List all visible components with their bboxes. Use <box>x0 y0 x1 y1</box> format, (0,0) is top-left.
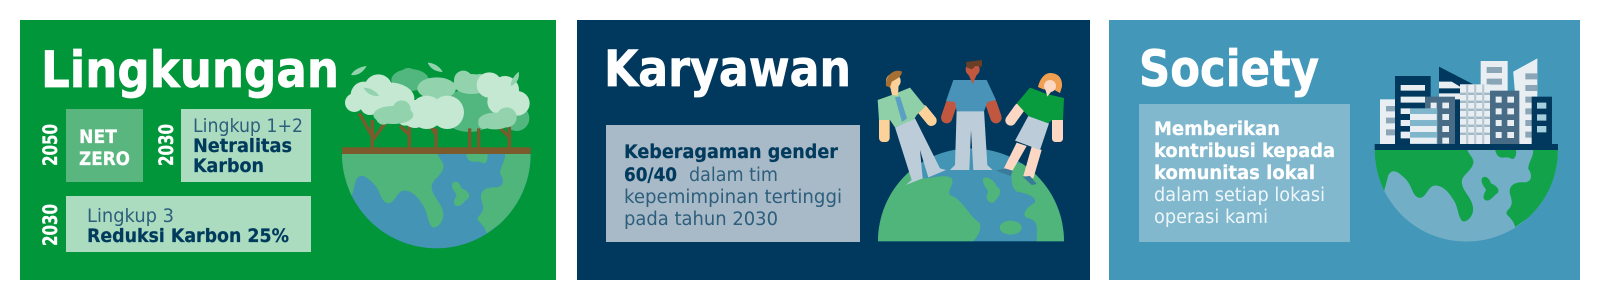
text box: gender diversity: 60/40 <box>624 165 677 186</box>
ground bar <box>1375 144 1558 150</box>
person: man in green shirt <box>878 71 946 185</box>
text box: gender diversity: kepemimpinan tertinggi <box>624 187 842 208</box>
year label 2030 scope 1+2: 2030 <box>155 124 178 166</box>
panel: Society <box>1109 20 1580 280</box>
ground bar <box>342 147 531 154</box>
globe half <box>340 153 533 250</box>
text box: community contribution: dalam setiap lokasi <box>1154 185 1325 206</box>
year label 2030 scope 3: 2030 <box>39 204 62 246</box>
text box: community contribution: Memberikan <box>1154 119 1280 140</box>
box: net zero: NET <box>79 126 117 148</box>
panel: Lingkungan <box>20 20 556 280</box>
box: carbon neutrality: Karbon <box>193 155 264 177</box>
panel: Karyawan <box>577 20 1090 280</box>
illustration: trees on globe <box>340 63 533 250</box>
person: man in blue shirt <box>946 60 996 170</box>
box: carbon reduction <box>66 196 311 252</box>
text box: gender diversity: pada tahun 2030 <box>624 209 778 230</box>
person: woman in green shirt <box>996 73 1064 185</box>
text box: community contribution: operasi kami <box>1154 207 1268 228</box>
box: carbon neutrality: Netralitas <box>193 135 292 157</box>
heading: Lingkungan: Lingkungan <box>41 41 339 99</box>
year label 2050: 2050 <box>39 124 62 166</box>
globe half <box>1373 149 1561 244</box>
text box: community contribution: komunitas lokal <box>1154 163 1315 184</box>
heading: Society: Society <box>1139 40 1319 98</box>
text box: community contribution: kontribusi kepada <box>1154 141 1335 162</box>
box: carbon reduction: Lingkup 3 <box>87 205 174 227</box>
box: carbon reduction: Reduksi Karbon 25% <box>87 225 289 247</box>
box: net zero: ZERO <box>79 148 130 170</box>
text box: community contribution <box>1139 104 1350 242</box>
tree canopies back <box>391 68 529 132</box>
box: carbon neutrality <box>181 109 311 182</box>
box: carbon neutrality: Lingkup 1+2 <box>193 115 303 137</box>
box: net zero <box>66 109 143 182</box>
text box: gender diversity <box>606 125 860 242</box>
illustration: people on globe <box>877 60 1067 243</box>
heading: Karyawan: Karyawan <box>604 40 851 98</box>
illustration: city on globe <box>1373 58 1561 244</box>
buildings <box>1380 58 1552 144</box>
globe dome <box>877 147 1067 243</box>
tree trunks <box>359 113 509 147</box>
text box: gender diversity: dalam tim <box>689 165 778 186</box>
tree canopies front <box>345 72 530 129</box>
text box: gender diversity: Keberagaman gender <box>624 142 839 163</box>
